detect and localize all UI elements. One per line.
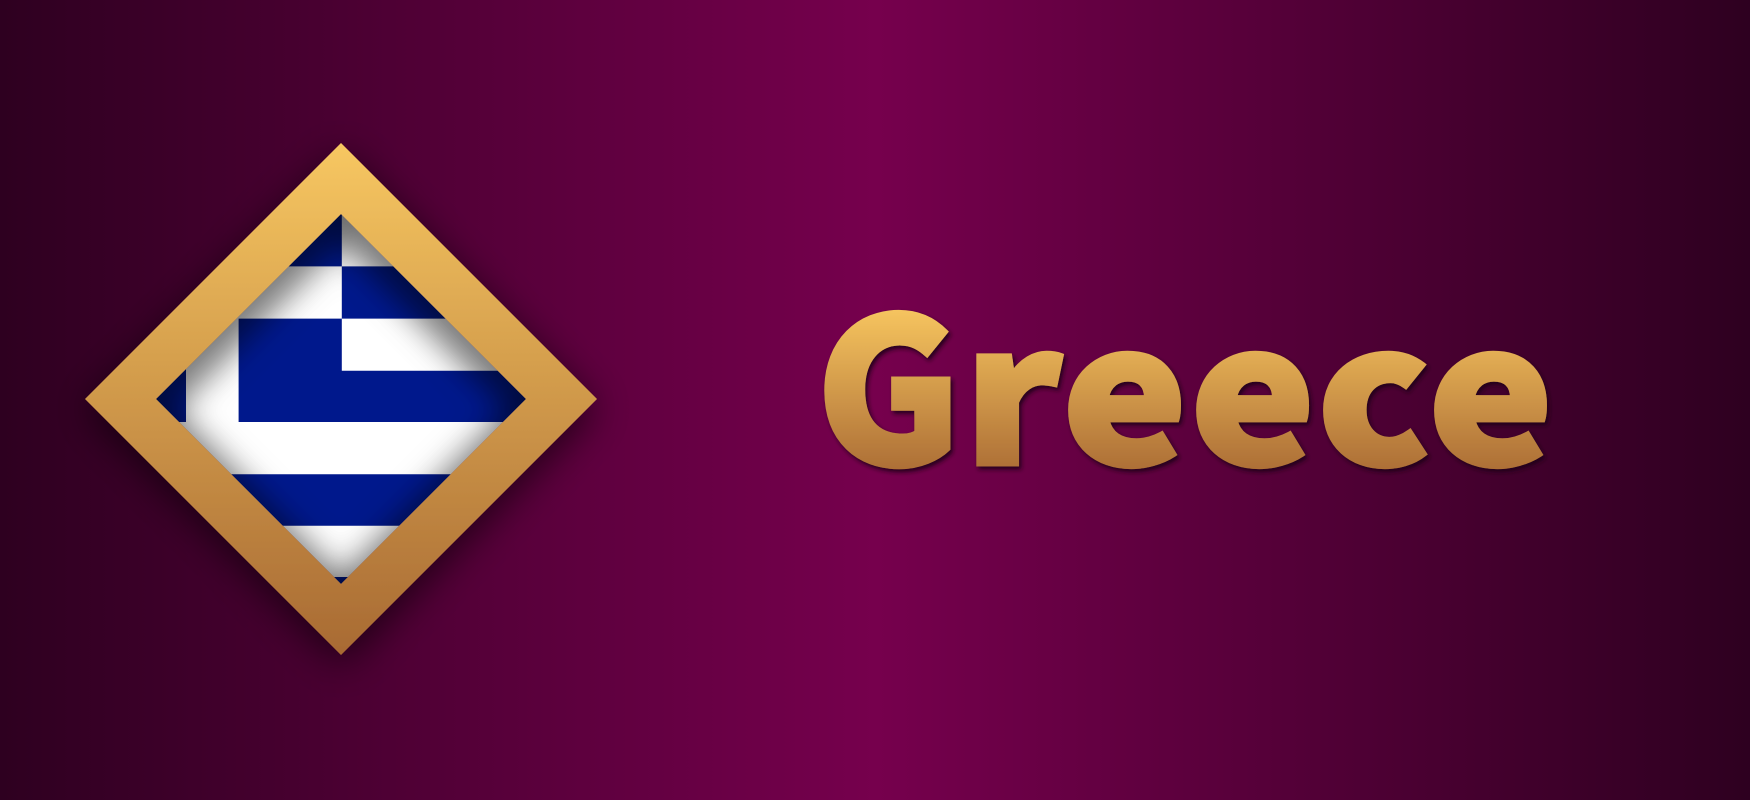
title: reece bbox=[964, 243, 1553, 519]
inner shadow bbox=[156, 226, 526, 596]
diamond gold frame bbox=[85, 143, 597, 655]
title: G bbox=[817, 232, 961, 522]
flag of Greece in diamond bbox=[150, 210, 532, 596]
